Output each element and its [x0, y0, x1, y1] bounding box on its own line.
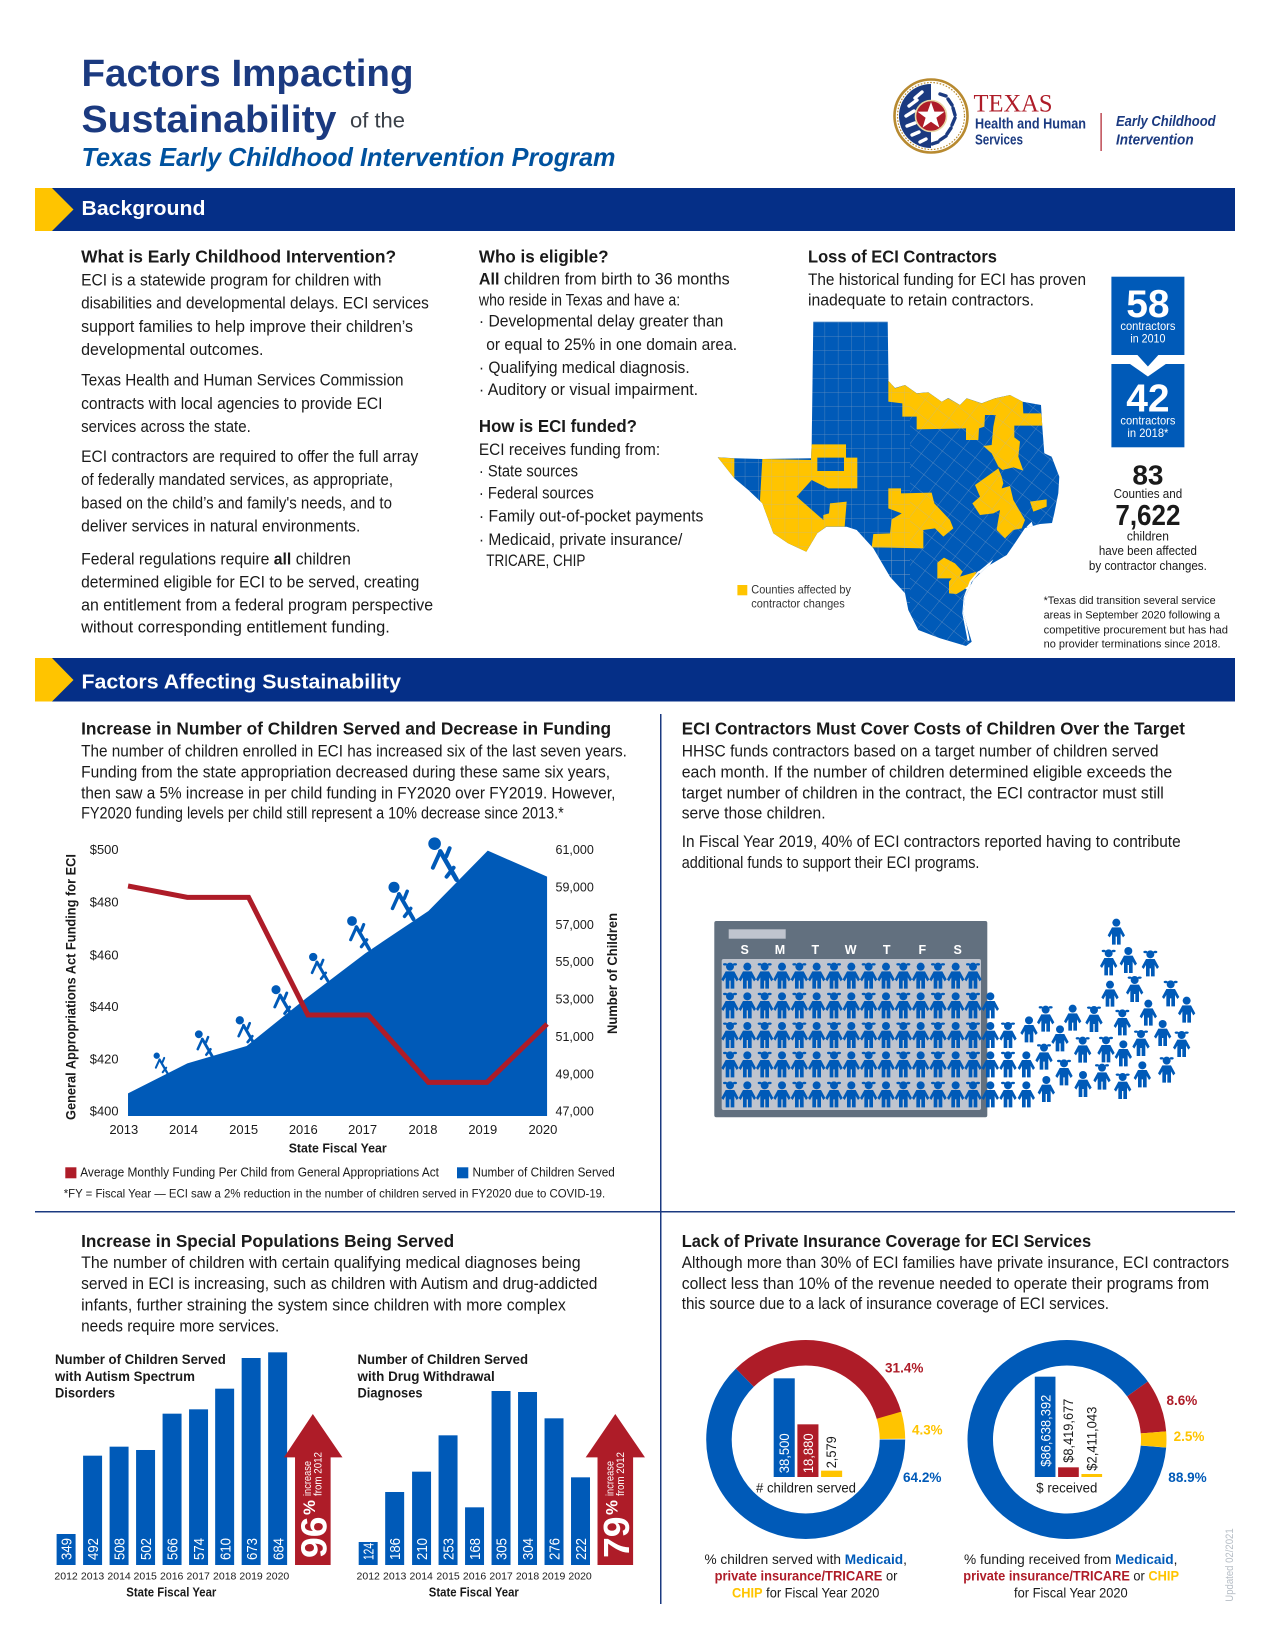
year labels: 2012	[54, 1570, 78, 1582]
arrow: 79% increase from 2012: increase	[604, 1461, 616, 1496]
text block: What is Early Childhood Intervention?	[80, 246, 433, 637]
inner label: # children served	[756, 1479, 856, 1495]
chart title	[54, 1352, 226, 1400]
arrow: 79% increase from 2012	[586, 1414, 645, 1565]
icon: state seal	[894, 80, 968, 152]
right axis labels: 53,000	[556, 991, 594, 1006]
map: Texas counties affected by contractor changes	[710, 315, 1070, 655]
year labels: 2017	[187, 1570, 210, 1582]
inner bar values: $2,411,043	[1084, 1407, 1100, 1471]
logo: Texas HHS seal and wordmark: Health and Human	[975, 115, 1086, 132]
callout: 58 contractors to 42 contractors: contractors	[1120, 413, 1175, 427]
callout: 83 counties and 7,622 children: have been affected	[1099, 544, 1197, 558]
text block: Loss of ECI Contractors: inadequate to retain contractors.	[808, 292, 1034, 310]
callout: 83 counties and 7,622 children: 7,622	[1115, 500, 1180, 532]
footnote: service area transition: areas in September 2020 following a	[1044, 610, 1221, 622]
text block: How is ECI funded?: TRICARE, CHIP	[486, 552, 585, 570]
x axis labels: 2016	[289, 1122, 318, 1137]
chart title: with Drug Withdrawal	[357, 1369, 495, 1384]
text block: What is Early Childhood Intervention?: support families to help improve their children’s	[81, 318, 413, 336]
area: number of children served	[128, 851, 547, 1116]
logo: Texas HHS seal and wordmark: Services	[975, 131, 1023, 148]
text block: Who is eligible?: who reside in Texas and have a:	[478, 292, 680, 310]
text block: What is Early Childhood Intervention?: Federal regulations require all children	[81, 550, 351, 568]
text block: Increase in Number of Children Served and Decrease in Funding: FY2020 funding levels per child still represent a 10% decrease since 2013.*	[81, 805, 564, 823]
percent labels: 88.9%	[1168, 1470, 1207, 1485]
text block: What is Early Childhood Intervention?: Texas Health and Human Services Commission	[81, 372, 404, 390]
x axis labels: 2019	[468, 1122, 497, 1137]
arrow: 96% increase from 2012	[284, 1414, 342, 1565]
title: of the	[350, 110, 405, 132]
illustration: calendar overflowing with children	[714, 919, 1195, 1117]
text block: What is Early Childhood Intervention?: developmental outcomes.	[81, 341, 263, 359]
logo: Texas HHS seal and wordmark: TEXAS	[974, 91, 1052, 118]
left axis labels: $440	[90, 999, 118, 1014]
x axis labels: 2017	[348, 1122, 377, 1137]
text block: What is Early Childhood Intervention?: an entitlement from a federal program perspective	[81, 597, 433, 615]
year labels: 2019	[542, 1570, 566, 1582]
text block: ECI Contractors Must Cover Costs: additional funds to support their ECI programs.	[682, 854, 979, 872]
text block: How is ECI funded?: How is ECI funded?	[479, 416, 637, 436]
text block: What is Early Childhood Intervention?: deliver services in natural environments.	[81, 518, 360, 536]
section header: Factors Affecting Sustainability	[35, 658, 1235, 702]
callout: 58 contractors to 42 contractors: in 2010	[1130, 332, 1166, 346]
calendar: T	[883, 943, 891, 957]
inner bar values: 38,500	[776, 1433, 792, 1473]
bar values: 186	[388, 1538, 404, 1560]
x axis labels: 2015	[229, 1122, 258, 1137]
x axis labels: 2018	[409, 1122, 437, 1137]
footnote: service area transition: no provider terminations since 2018.	[1044, 638, 1221, 650]
text block: How is ECI funded?	[479, 416, 703, 570]
caption: CHIP for Fiscal Year 2020	[732, 1584, 880, 1600]
caption: private insurance/TRICARE or CHIP	[963, 1568, 1179, 1584]
text block: Increase in Number of Children Served and Decrease in Funding	[81, 718, 627, 823]
bar chart: drug withdrawal diagnoses	[357, 1352, 645, 1600]
chart title: Disorders	[55, 1385, 115, 1400]
year labels	[357, 1570, 592, 1582]
chart legend: Number of Children Served	[472, 1166, 615, 1180]
arrow: 96% increase from 2012: from 2012	[312, 1452, 324, 1496]
text block: Lack of Private Insurance Coverage: collect less than 10% of the revenue needed to operate their programs from	[682, 1275, 1209, 1293]
callout: 58 contractors to 42 contractors: contractors	[1120, 319, 1175, 333]
text block: Who is eligible?: · Qualifying medical diagnosis.	[479, 359, 690, 377]
bar values: 566	[166, 1538, 182, 1560]
text block: What is Early Childhood Intervention?: disabilities and developmental delays. ECI services	[81, 295, 429, 313]
year labels: 2014	[410, 1570, 433, 1582]
arrow: 96% increase from 2012: %	[300, 1500, 319, 1515]
inner bar values	[776, 1433, 839, 1473]
year labels: 2018	[516, 1570, 539, 1582]
bar values: 508	[112, 1538, 128, 1560]
year labels	[54, 1570, 289, 1582]
axis title: State Fiscal Year	[126, 1586, 216, 1600]
text block: How is ECI funded?: · State sources	[479, 462, 578, 480]
bar values: 168	[468, 1538, 484, 1560]
map legend	[737, 583, 851, 611]
bar values: 253	[441, 1538, 457, 1560]
text block: What is Early Childhood Intervention?: determined eligible for ECI to be served, creating	[81, 573, 419, 591]
children over the target	[982, 919, 1195, 1107]
bar values: 502	[139, 1538, 155, 1560]
left axis labels: $460	[90, 947, 118, 962]
update stamp: Updated 02/2021	[1224, 1528, 1236, 1602]
logo: Texas HHS seal and wordmark	[894, 80, 1216, 152]
callout: 83 counties and 7,622 children: 83	[1132, 459, 1163, 490]
x axis labels: 2020	[528, 1122, 557, 1137]
year labels: 2016	[463, 1570, 486, 1582]
callout: 58 contractors to 42 contractors: 58	[1126, 283, 1170, 326]
footnote: service area transition: competitive procurement but has had	[1044, 624, 1228, 636]
text block: Who is eligible?	[478, 246, 737, 399]
arrow: 79% increase from 2012: 79	[596, 1516, 637, 1558]
text block: ECI Contractors Must Cover Costs: serve those children.	[682, 805, 826, 823]
inner bar values: 18,880	[800, 1433, 816, 1473]
text block: Loss of ECI Contractors: The historical funding for ECI has proven	[808, 271, 1086, 289]
right axis labels: 47,000	[556, 1104, 594, 1119]
bar values: 210	[415, 1538, 431, 1560]
year labels: 2015	[436, 1570, 460, 1582]
text block: Increase in Number of Children Served and Decrease in Funding: Funding from the state appropriation decreased during these same six years,	[81, 764, 610, 782]
left axis labels: $500	[90, 842, 118, 857]
text block: Lack of Private Insurance Coverage: this source due to a lack of insurance coverage of ECI services.	[682, 1295, 1109, 1313]
text block: Increase in Special Populations Being Served: Increase in Special Populations Being Served	[81, 1231, 454, 1251]
chart legend: Average Monthly Funding Per Child from General Appropriations Act	[80, 1166, 439, 1180]
year labels: 2014	[107, 1570, 131, 1582]
inner bar values: 2,579	[823, 1436, 839, 1468]
calendar	[714, 921, 987, 1117]
calendar: S	[954, 943, 962, 957]
callout: 83 counties and 7,622 children: by contractor changes.	[1089, 559, 1207, 573]
donut chart: children served	[704, 1353, 943, 1600]
bars	[57, 1352, 287, 1565]
logo: Texas HHS seal and wordmark: Early Childhood	[1116, 113, 1216, 130]
chart: funding per child vs number of children served	[64, 837, 620, 1200]
logo: Texas HHS seal and wordmark: Intervention	[1116, 131, 1194, 148]
chart title: with Autism Spectrum	[54, 1369, 195, 1384]
chart title	[357, 1352, 528, 1400]
year labels: 2015	[134, 1570, 157, 1582]
year labels: 2013	[383, 1570, 407, 1582]
inner bar values	[1038, 1395, 1100, 1471]
bar values: 222	[574, 1538, 590, 1560]
calendar: F	[918, 943, 926, 957]
chart title: Diagnoses	[358, 1385, 422, 1400]
right axis labels: 59,000	[556, 880, 594, 895]
inner bar values: $86,638,392	[1038, 1395, 1054, 1467]
text block: Increase in Special Populations Being Served: needs require more services.	[81, 1317, 279, 1335]
text block: How is ECI funded?: · Medicaid, private insurance/	[479, 531, 683, 549]
year labels: 2018	[213, 1570, 237, 1582]
right axis labels: 57,000	[556, 917, 594, 932]
callout: 83 counties and 7,622 children	[1089, 459, 1207, 573]
text block: Who is eligible?: · Developmental delay greater than	[479, 313, 723, 331]
left axis labels	[90, 842, 118, 1119]
text block: ECI Contractors Must Cover Costs: HHSC funds contractors based on a target number of children served	[682, 743, 1159, 761]
text block: Lack of Private Insurance Coverage: Although more than 30% of ECI families have private insurance, ECI contractors	[682, 1254, 1229, 1272]
title: Texas Early Childhood Intervention Program	[82, 142, 616, 172]
left axis labels: $480	[90, 895, 118, 910]
text block: Increase in Number of Children Served and Decrease in Funding: The number of children enrolled in ECI has increased six of the last seven years.	[81, 743, 627, 761]
text block: What is Early Childhood Intervention?: based on the child’s and family's needs, and to	[81, 494, 392, 512]
percent labels: 8.6%	[1166, 1393, 1197, 1408]
caption: private insurance/TRICARE or	[715, 1568, 898, 1584]
text block: Increase in Special Populations Being Served: infants, further straining the system since children with more complex	[81, 1296, 566, 1314]
left axis labels: $400	[90, 1104, 118, 1119]
icons: climbing children	[154, 837, 457, 1074]
right axis labels: 49,000	[556, 1066, 594, 1081]
bar values: 610	[218, 1538, 234, 1560]
text block: What is Early Childhood Intervention?: ECI is a statewide program for children with	[81, 272, 381, 290]
donut ring	[973, 1346, 1161, 1533]
text block: Increase in Number of Children Served and Decrease in Funding: then saw a 5% increase in per child funding in FY2020 over FY2019. However,	[81, 785, 615, 803]
panel dividers	[35, 714, 1235, 1604]
year labels: 2017	[489, 1570, 513, 1582]
axis title: State Fiscal Year	[429, 1586, 519, 1600]
donut ring	[719, 1353, 892, 1526]
footnote: service area transition	[1044, 595, 1228, 650]
map legend: Counties affected by	[751, 583, 851, 596]
bars	[359, 1391, 590, 1565]
footnote: service area transition: *Texas did transition several service	[1044, 595, 1216, 607]
title: Factors Impacting	[82, 53, 414, 95]
callout: 58 contractors to 42 contractors: in 2018*	[1127, 426, 1169, 440]
right axis labels	[556, 842, 594, 1119]
arrow: 79% increase from 2012: %	[602, 1500, 622, 1515]
year labels: 2020	[568, 1570, 592, 1582]
text block: What is Early Childhood Intervention?: contracts with local agencies to provide ECI	[81, 395, 382, 413]
text block: How is ECI funded?: ECI receives funding from:	[479, 441, 660, 459]
text block: ECI Contractors Must Cover Costs: In Fiscal Year 2019, 40% of ECI contractors reported having to contribute	[682, 833, 1181, 851]
inner bars	[1035, 1377, 1102, 1477]
map legend: contractor changes	[751, 598, 845, 611]
callout: 83 counties and 7,622 children: children	[1127, 530, 1169, 544]
text block: What is Early Childhood Intervention?: without corresponding entitlement funding.	[80, 619, 390, 637]
percent labels: 31.4%	[885, 1361, 923, 1376]
bar values: 673	[245, 1538, 261, 1560]
right axis labels: 61,000	[556, 842, 594, 857]
text block: ECI Contractors Must Cover Costs: ECI Contractors Must Cover Costs of Children Over the Target	[682, 718, 1185, 738]
caption	[704, 1551, 907, 1600]
left axis title: General Appropriations Act Funding for ECI	[64, 854, 79, 1120]
calendar: T	[811, 943, 819, 957]
line: average monthly funding per child	[128, 886, 547, 1082]
text block: What is Early Childhood Intervention?: What is Early Childhood Intervention?	[81, 246, 396, 266]
bar values: 349	[60, 1538, 76, 1560]
left axis labels: $420	[90, 1051, 118, 1066]
text block: What is Early Childhood Intervention?: of federally mandated services, as appropriate,	[81, 471, 393, 489]
x axis labels: 2014	[169, 1122, 198, 1137]
text block: Who is eligible?: · Auditory or visual impairment.	[479, 381, 698, 399]
title	[82, 53, 616, 172]
x axis labels: 2013	[109, 1122, 138, 1137]
bar values: 574	[192, 1538, 208, 1560]
year labels: 2012	[357, 1570, 380, 1582]
calendar: W	[845, 943, 857, 957]
text block: What is Early Childhood Intervention?: services across the state.	[81, 418, 251, 436]
bar values: 304	[521, 1538, 537, 1560]
text block: Increase in Special Populations Being Served	[81, 1231, 597, 1335]
bar values: 684	[271, 1538, 287, 1560]
inner bars	[774, 1378, 842, 1477]
arrow: 96% increase from 2012: 96	[294, 1516, 335, 1558]
callout: 83 counties and 7,622 children: Counties and	[1114, 487, 1182, 501]
x axis title: State Fiscal Year	[289, 1141, 387, 1156]
right axis labels: 55,000	[556, 954, 594, 969]
text block: ECI Contractors Must Cover Costs	[682, 718, 1185, 872]
chart title: Number of Children Served	[358, 1352, 528, 1367]
text block: Increase in Special Populations Being Served: served in ECI is increasing, such as children with Autism and drug-addicted	[81, 1275, 597, 1293]
caption	[963, 1551, 1179, 1600]
callout: 58 contractors to 42 contractors	[1111, 277, 1184, 447]
calendar: S	[741, 943, 749, 957]
year labels: 2013	[81, 1570, 104, 1582]
title: Sustainability	[82, 99, 336, 141]
percent labels: 2.5%	[1174, 1429, 1204, 1444]
text block: Loss of ECI Contractors	[808, 247, 1086, 310]
year labels: 2016	[160, 1570, 184, 1582]
inner label: $ received	[1036, 1479, 1097, 1495]
text block: Increase in Special Populations Being Served: The number of children with certain qualifying medical diagnoses being	[81, 1254, 581, 1272]
text block: Who is eligible?: All children from birth to 36 months	[479, 270, 730, 288]
arrow: 79% increase from 2012: from 2012	[615, 1452, 627, 1496]
bar values: 124	[362, 1543, 378, 1560]
text block: How is ECI funded?: · Family out-of-pocket payments	[479, 508, 703, 526]
section header: Background: Background	[82, 197, 206, 220]
bar values	[60, 1538, 287, 1560]
percent labels: 64.2%	[903, 1470, 942, 1485]
arrow: 96% increase from 2012: increase	[302, 1461, 314, 1496]
percent labels	[1166, 1393, 1207, 1485]
callout: 58 contractors to 42 contractors: 42	[1126, 378, 1170, 421]
chart title: Number of Children Served	[55, 1352, 226, 1367]
donut chart: funding received	[963, 1346, 1207, 1600]
chart legend	[65, 1166, 615, 1180]
year labels: 2020	[266, 1570, 289, 1582]
calendar: M	[775, 943, 785, 957]
caption: for Fiscal Year 2020	[1014, 1584, 1128, 1600]
caption: % children served with Medicaid,	[704, 1551, 907, 1567]
children within the target	[721, 963, 982, 1107]
year labels: 2019	[239, 1570, 263, 1582]
text block: Lack of Private Insurance Coverage	[682, 1231, 1229, 1313]
right axis title: Number of Children	[605, 913, 620, 1034]
bar values	[362, 1538, 590, 1560]
text block: How is ECI funded?: · Federal sources	[479, 484, 594, 502]
text block: Lack of Private Insurance Coverage: Lack of Private Insurance Coverage for ECI Services	[682, 1231, 1091, 1251]
section header: Factors Affecting Sustainability: Factors Affecting Sustainability	[82, 670, 402, 694]
text block: Who is eligible?: or equal to 25% in one domain area.	[486, 336, 737, 354]
percent labels: 4.3%	[912, 1423, 943, 1438]
section header: Background	[35, 188, 1235, 231]
bar values: 305	[494, 1538, 510, 1560]
bar values: 276	[547, 1538, 563, 1560]
text block: ECI Contractors Must Cover Costs: each month. If the number of children determined eligible exceeds the	[682, 764, 1172, 782]
chart footnote: *FY = Fiscal Year — ECI saw a 2% reduction in the number of children served in FY2020 due to COVID-19.	[64, 1186, 605, 1200]
inner bar values: $8,419,677	[1060, 1399, 1076, 1463]
x axis labels	[109, 1122, 557, 1137]
bar chart: autism spectrum disorders	[54, 1352, 342, 1600]
text block: Increase in Number of Children Served and Decrease in Funding: Increase in Number of Children Served and Decrease in Funding	[81, 718, 611, 738]
bar values: 492	[86, 1538, 102, 1560]
text block: What is Early Childhood Intervention?: ECI contractors are required to offer the full array	[81, 448, 419, 466]
text block: ECI Contractors Must Cover Costs: target number of children in the contract, the ECI contractor must still	[682, 785, 1164, 803]
caption: % funding received from Medicaid,	[964, 1551, 1177, 1567]
text block: Who is eligible?: Who is eligible?	[479, 246, 609, 266]
percent labels	[885, 1361, 943, 1485]
right axis labels: 51,000	[556, 1029, 594, 1044]
text block: Loss of ECI Contractors: Loss of ECI Contractors	[808, 247, 997, 267]
